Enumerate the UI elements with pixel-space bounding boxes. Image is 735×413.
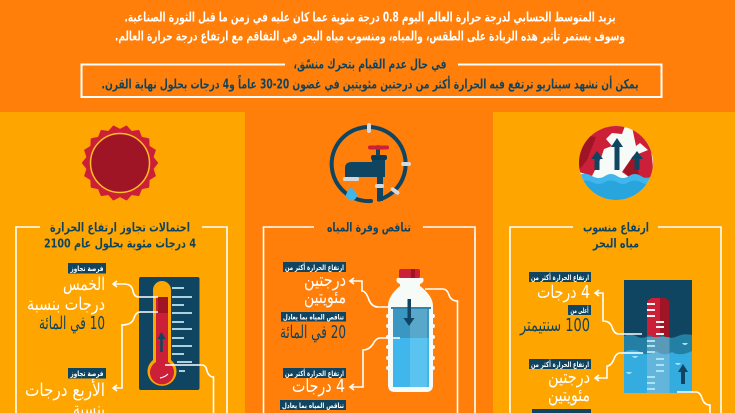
label: four degrees chance xyxy=(25,368,106,413)
label: two degrees water: ارتفاع الحرارة أكثر من xyxy=(285,262,344,272)
label: two degrees sea level: مئويتين xyxy=(548,385,590,406)
heading: sea level: مياه البحر xyxy=(592,236,639,250)
panel: intro text xyxy=(115,10,625,44)
label: one in ten chance of five degrees: درجات بنسبة xyxy=(27,294,105,315)
label: one in ten chance of five degrees xyxy=(27,263,106,334)
icon: sun xyxy=(83,127,157,199)
arrow: four degree bottle connector xyxy=(350,338,400,390)
callout: inaction scenario: في حال عدم القيام بتحرك منسّق، xyxy=(294,58,446,72)
heading: temperature: 4 درجات مئوية بحلول عام 2100 xyxy=(44,236,196,252)
heading: water: تناقص وفرة المياه xyxy=(327,220,411,234)
arrow: gauge bottom connector xyxy=(677,392,710,413)
callout: inaction scenario xyxy=(82,58,662,97)
panel: intro text: يزيد المتوسط الحسابي لدرجة حرارة العالم اليوم 0.8 درجة مئوية عما كان عليه في زمن ما قبل الثورة الصناعية. xyxy=(124,10,616,26)
label: two degrees sea level: درجتين xyxy=(548,367,590,388)
arrow: two degree gauge connector xyxy=(595,353,643,381)
heading: temperature xyxy=(44,220,196,252)
label: two degrees water: مئويتين xyxy=(304,287,346,308)
label: four degrees sea level: أعلى من xyxy=(570,305,588,315)
label: two degrees water: درجتين xyxy=(304,270,346,291)
arrow: four degree gauge connector xyxy=(595,290,642,334)
label: two degrees water: 20 في المائة xyxy=(280,322,346,343)
arrow: bottle connector xyxy=(425,289,458,413)
panel frame: water xyxy=(264,227,475,413)
label: two degrees sea level: ارتفاع الحرارة أكثر من xyxy=(531,359,589,369)
arrow: four degree connector xyxy=(113,312,158,391)
label: four degrees water: 4 درجات xyxy=(292,376,345,397)
panel frame: sea level xyxy=(510,227,721,413)
panel: water column xyxy=(264,123,475,413)
heading: sea level xyxy=(583,220,649,250)
icon: globe with rising arrows xyxy=(579,125,654,205)
label: four degrees sea level xyxy=(519,272,591,336)
arrow: two degree bottle connector xyxy=(350,278,388,307)
label: four degrees chance: فرصة تجاوز xyxy=(70,369,104,378)
label: two degrees water xyxy=(280,262,346,343)
panel frame: temperature xyxy=(16,227,227,413)
label: four degrees sea level: 4 درجات xyxy=(537,282,590,303)
icon: tap and pipe ring xyxy=(332,123,411,201)
chart: sea level gauge xyxy=(624,280,692,393)
label: four degrees water xyxy=(280,368,346,410)
label: one in ten chance of five degrees: الخمس xyxy=(63,274,105,295)
heading: sea level: ارتفاع منسوب xyxy=(583,220,649,234)
label: two degrees sea level xyxy=(529,359,591,413)
label: four degrees sea level: 100 سنتيمتر xyxy=(519,315,590,336)
label: four degrees water: تناقص المياه بما يعادل xyxy=(282,401,344,410)
arrow: five degree connector xyxy=(113,281,158,297)
arrow: thermometer bulb connector xyxy=(165,365,214,413)
panel: temperature column xyxy=(0,112,245,413)
label: four degrees sea level: ارتفاع الحرارة أكثر من xyxy=(531,272,589,282)
label: one in ten chance of five degrees: فرصة تجاوز xyxy=(70,264,104,273)
label: one in ten chance of five degrees: 10 في المائة xyxy=(39,313,105,334)
heading: temperature: احتمالات تجاوز ارتفاع الحرارة xyxy=(50,220,190,234)
label: four degrees chance: الأربع درجات xyxy=(25,379,105,401)
label: four degrees water: ارتفاع الحرارة أكثر من xyxy=(285,368,344,378)
chart: water bottle xyxy=(386,269,435,392)
chart: thermometer xyxy=(139,277,200,390)
label: two degrees water: تناقص المياه بما يعادل xyxy=(283,312,344,322)
panel: sea level column xyxy=(493,112,735,413)
